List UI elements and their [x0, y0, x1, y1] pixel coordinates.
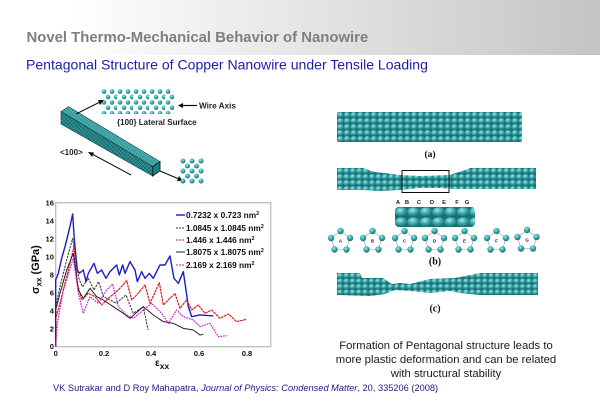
curves [56, 214, 247, 347]
pentagon F [484, 228, 509, 253]
y axis ticks [46, 198, 55, 351]
y axis label: (GPa) [30, 245, 42, 278]
citation: VK Sutrakar and D Roy Mahapatra, Journal of Physics: Condensed Matter, 20, 335206 (2008) [53, 383, 438, 393]
labels A-G: G [465, 200, 470, 206]
pentagon F: F [495, 238, 498, 244]
arrow: to lateral surface [76, 100, 104, 114]
x axis ticks: 0.2 [99, 349, 109, 358]
legend: 1.8075: 1.8075 x 1.8075 nm [186, 247, 261, 257]
arrow: wire axis [178, 103, 197, 108]
wire (c) with neck [337, 273, 538, 296]
y axis ticks: 4 [50, 306, 55, 316]
y axis ticks: 8 [50, 270, 54, 280]
legend [176, 210, 264, 270]
selection box [402, 170, 449, 192]
caption: with structural stability [390, 368, 502, 380]
cross sections [328, 227, 540, 253]
x axis label: xx [160, 361, 169, 371]
x axis ticks: 0.8 [242, 349, 252, 358]
plot frame [56, 203, 271, 347]
legend: 1.0845: 1.0845 x 1.0845 nm [186, 223, 261, 233]
figure: atomistic snapshots [328, 112, 540, 314]
y axis label: xx [34, 277, 44, 286]
label (b): (b) [429, 256, 441, 268]
caption [336, 340, 556, 380]
chart: stress vs strain [30, 198, 271, 371]
atom patch: lateral surface [101, 89, 174, 114]
x axis ticks [54, 349, 252, 358]
pentagon G [514, 227, 540, 252]
pentagon C: C [403, 238, 407, 244]
label: direction: <100> [60, 148, 83, 157]
labels A-G: A [396, 200, 401, 206]
x axis label: ε [155, 358, 160, 369]
pentagon E: E [463, 238, 466, 244]
beam: square nanowire [61, 107, 160, 176]
pentagon D: D [433, 238, 437, 244]
atom patch: cross section [180, 158, 204, 184]
subtitle: Pentagonal Structure of Copper Nanowire under Tensile Loading [26, 56, 428, 72]
legend: 0.7232: 2 [256, 211, 259, 217]
legend: 1.446: 2 [252, 236, 255, 242]
labels A-G: C [417, 200, 422, 206]
pentagon E [452, 228, 477, 253]
x axis ticks: 0.4 [146, 349, 157, 358]
labels A-G: B [405, 200, 409, 206]
wire (b) with neck [337, 168, 536, 191]
y axis ticks: 6 [50, 288, 54, 298]
wire (a) [337, 112, 522, 142]
x axis ticks: 0.6 [194, 349, 204, 358]
label: wire axis: Wire Axis [199, 102, 236, 110]
header band [0, 0, 600, 55]
y axis ticks: 14 [46, 216, 55, 226]
legend: 1.0845: 2 [261, 224, 264, 230]
label: lateral surface: {100} Lateral Surface [117, 118, 197, 127]
y axis ticks: 10 [46, 252, 54, 262]
pentagon C [392, 228, 417, 253]
labels A-G: F [455, 200, 459, 206]
pentagon B: B [371, 238, 375, 244]
pentagon A [328, 228, 353, 253]
label (a): (a) [424, 149, 436, 160]
labels A-G: E [442, 200, 446, 206]
arrow: tensile direction [88, 152, 131, 175]
legend: 0.7232: 0.7232 x 0.723 nm [186, 210, 256, 220]
y axis ticks: 12 [46, 234, 54, 244]
label (c): (c) [429, 304, 441, 314]
pentagon B [360, 228, 385, 253]
arrow: to end section [160, 171, 183, 181]
legend: 1.8075: 2 [261, 248, 264, 254]
caption: more plastic deformation and can be related [336, 354, 556, 366]
title: Novel Thermo-Mechanical Behavior of Nanowire [26, 30, 368, 46]
pentagon D [422, 228, 447, 253]
diagram: nanowire schematic [60, 89, 236, 184]
labels A-G [396, 200, 470, 206]
labels A-G: D [430, 200, 434, 206]
pentagon A: A [339, 238, 343, 244]
y axis ticks: 0 [50, 342, 54, 351]
caption: Formation of Pentagonal structure leads to [339, 340, 553, 352]
y axis ticks: 16 [46, 198, 54, 208]
legend: 2.169: 2.169 x 2.169 nm [186, 260, 252, 270]
legend: 1.446: 1.446 x 1.446 nm [186, 235, 252, 245]
legend: 2.169: 2 [252, 261, 255, 267]
x axis ticks: 0 [54, 349, 58, 358]
y axis label: σ [30, 286, 42, 294]
enlarged selection [395, 207, 475, 227]
y axis ticks: 2 [50, 324, 54, 334]
pentagon G: G [525, 238, 529, 242]
